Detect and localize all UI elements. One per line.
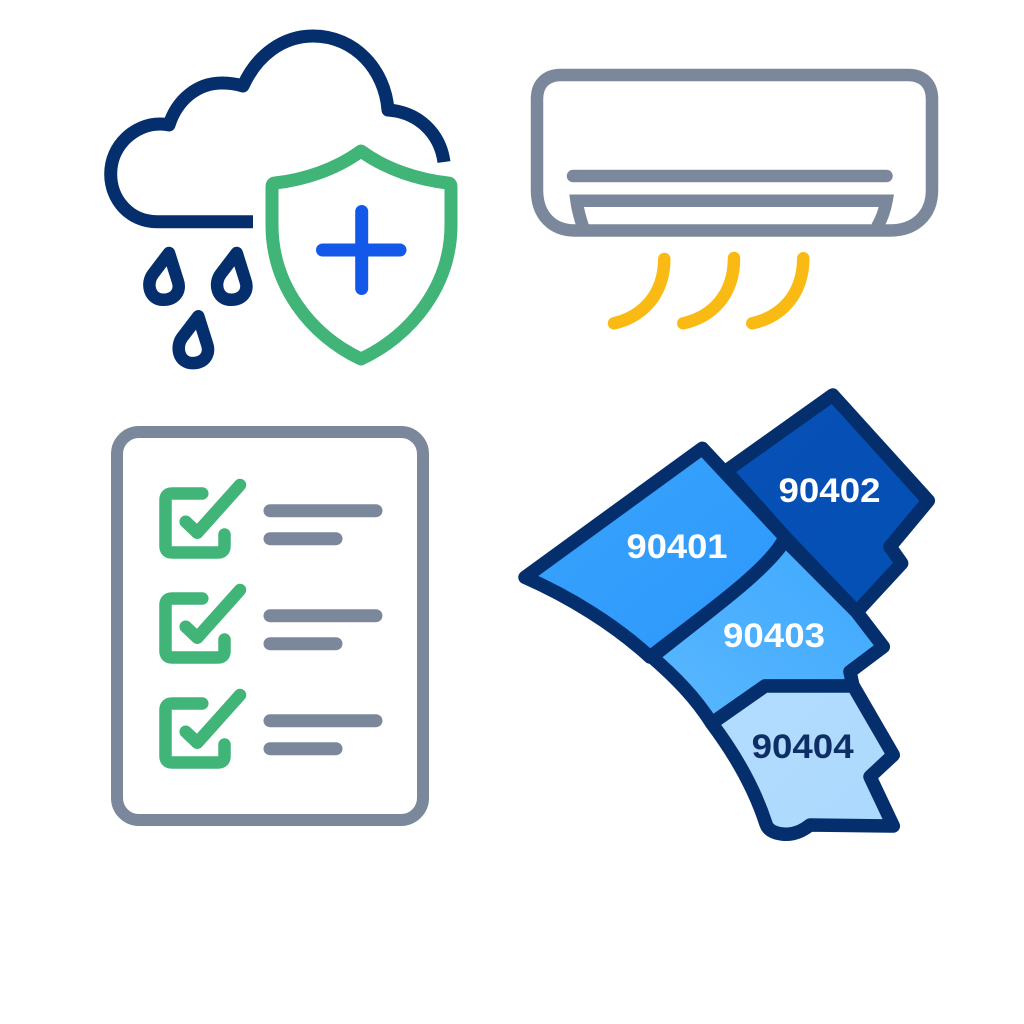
region 90402: 90402 bbox=[778, 472, 880, 510]
check item 1 bbox=[166, 485, 376, 552]
icon: air conditioner bbox=[537, 75, 932, 323]
icon: checklist bbox=[117, 432, 423, 820]
louver bbox=[576, 201, 886, 227]
region 90404: 90404 bbox=[752, 728, 854, 766]
document bbox=[117, 432, 423, 820]
raindrops bbox=[149, 253, 246, 363]
region 90401: 90401 bbox=[626, 528, 728, 566]
check item 2 bbox=[166, 590, 376, 658]
air flow bbox=[614, 258, 803, 323]
region 90402 bbox=[726, 395, 928, 612]
region 90403: 90403 bbox=[723, 617, 825, 655]
cloud outline bbox=[111, 36, 444, 222]
icon: rain cloud with shield bbox=[111, 36, 451, 363]
upper vent line bbox=[573, 170, 886, 182]
unit body bbox=[537, 75, 932, 230]
region 90403 bbox=[652, 540, 883, 723]
shield bbox=[272, 151, 451, 359]
region 90401 bbox=[525, 448, 785, 657]
check item 3 bbox=[166, 695, 376, 762]
medical cross bbox=[322, 212, 400, 288]
region 90404 bbox=[712, 686, 893, 834]
zip code map bbox=[525, 395, 928, 834]
